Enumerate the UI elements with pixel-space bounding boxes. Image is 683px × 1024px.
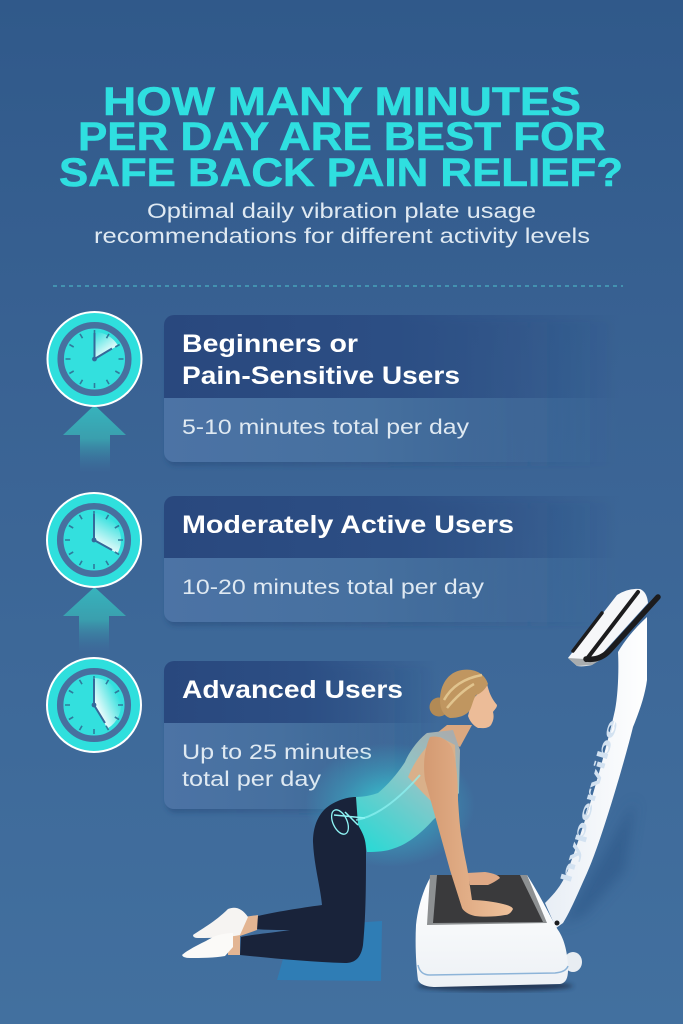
title: HOW MANY MINUTES — [103, 80, 581, 124]
spine highlight — [328, 775, 420, 837]
card: advanced: Advanced Users — [182, 676, 403, 704]
head — [468, 684, 497, 728]
card: advanced — [164, 661, 440, 813]
base stripe — [418, 965, 568, 975]
card: beginners: Beginners or — [182, 330, 358, 358]
neck — [437, 725, 472, 747]
arrow: up from clock 3 to clock 2 — [63, 587, 126, 652]
glow around spine — [305, 743, 475, 867]
hair — [440, 670, 488, 718]
title — [59, 80, 623, 195]
exercise mat — [277, 921, 382, 981]
hair bun — [430, 698, 448, 716]
card: moderately active — [164, 496, 620, 626]
title: SAFE BACK PAIN RELIEF? — [59, 151, 623, 195]
icon: clock 3 — [47, 658, 141, 752]
column — [545, 617, 647, 928]
icon: clock 1 — [48, 312, 142, 406]
woman kneeling on vibration plate — [182, 670, 513, 963]
far hand — [467, 872, 500, 885]
plate — [427, 875, 547, 925]
tank top — [355, 730, 460, 852]
arm — [424, 737, 513, 917]
card: beginners: Pain-Sensitive Users — [182, 362, 460, 390]
foot nub — [564, 952, 582, 972]
icon: clock 2 — [47, 493, 141, 587]
card: advanced: Up to 25 minutes — [182, 741, 372, 764]
vibration plate machine — [416, 589, 658, 991]
pants — [240, 797, 366, 963]
base — [416, 875, 568, 987]
handle head — [568, 589, 658, 666]
card: beginners — [164, 315, 620, 466]
title: PER DAY ARE BEST FOR — [78, 115, 606, 159]
arrow: up from clock 2 to clock 1 — [63, 405, 126, 472]
subtitle — [94, 200, 590, 248]
upper back skin — [408, 737, 457, 805]
sock lower foot — [182, 933, 233, 958]
column brand text: hypervibe — [558, 717, 622, 885]
subtitle: recommendations for different activity levels — [94, 225, 590, 248]
card: beginners: 5-10 minutes total per day — [182, 416, 470, 439]
card: moderately active: 10-20 minutes total per day — [182, 576, 485, 599]
card: moderately active: Moderately Active Users — [182, 511, 514, 539]
card: advanced: total per day — [182, 768, 322, 791]
sock upper foot — [193, 908, 248, 938]
subtitle: Optimal daily vibration plate usage — [147, 200, 536, 223]
ankles — [228, 915, 258, 955]
